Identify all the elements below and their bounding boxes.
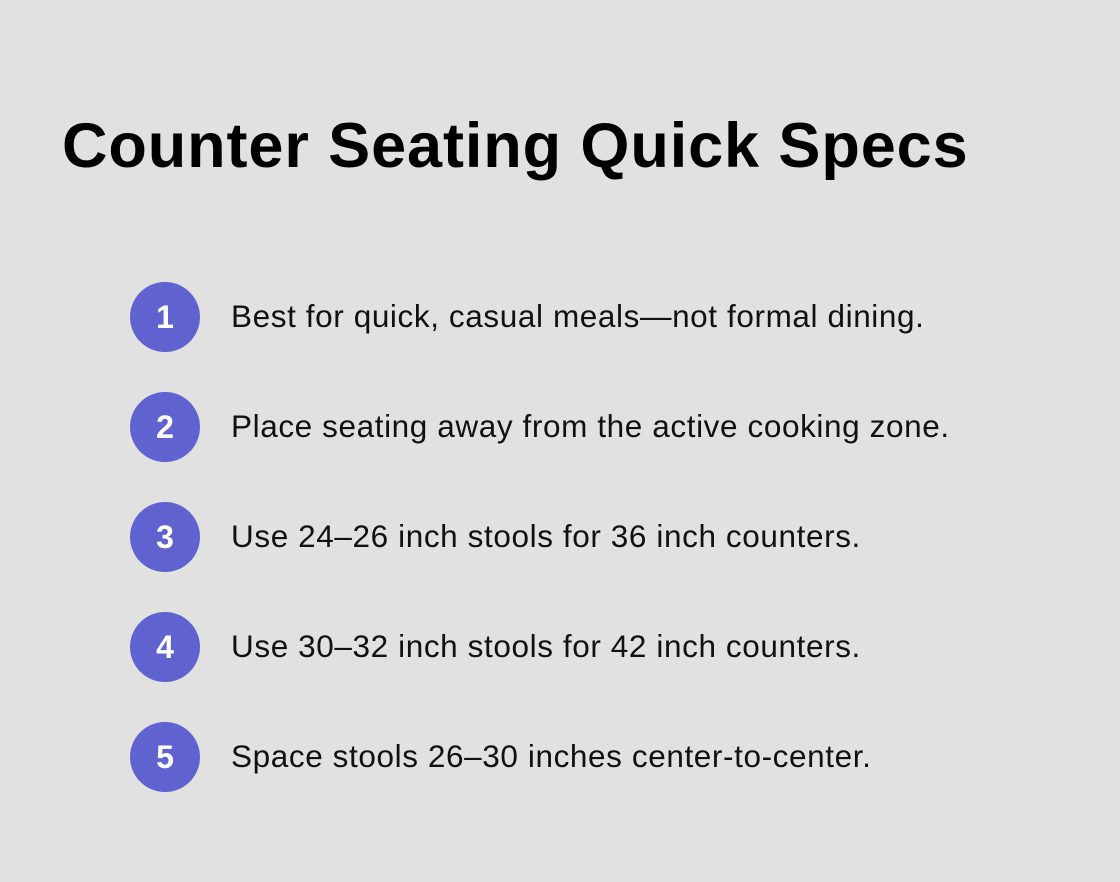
item 2: 2	[156, 409, 174, 445]
item 3: Use 24–26 inch stools for 36 inch counters.	[231, 518, 861, 554]
item 4: 4	[156, 629, 174, 665]
item 1: Best for quick, casual meals—not formal dining.	[231, 298, 924, 334]
item 2	[130, 392, 950, 462]
item 4: Use 30–32 inch stools for 42 inch counters.	[231, 628, 861, 664]
item 5: Space stools 26–30 inches center-to-center.	[231, 738, 871, 774]
item 4	[130, 612, 861, 682]
title: Counter Seating Quick Specs	[62, 111, 969, 181]
item 5: 5	[156, 739, 174, 775]
item 3	[130, 502, 861, 572]
item 1: 1	[156, 299, 174, 335]
item 1	[130, 282, 924, 352]
item 3: 3	[156, 519, 174, 555]
item 5	[130, 722, 871, 792]
item 2: Place seating away from the active cooking zone.	[231, 408, 950, 444]
